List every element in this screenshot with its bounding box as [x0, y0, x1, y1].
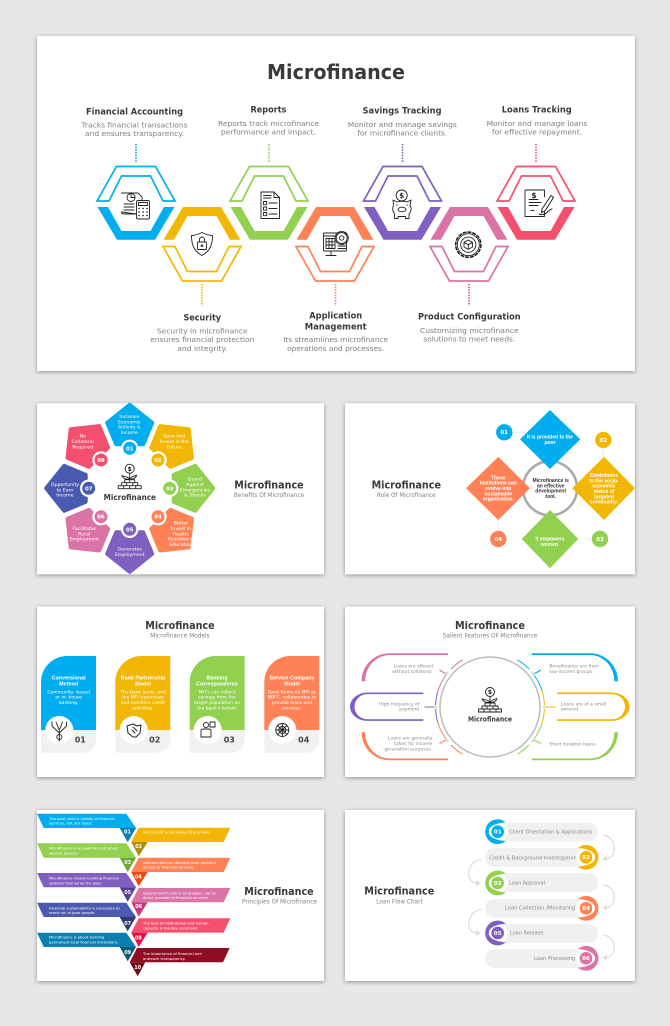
center text	[532, 478, 569, 500]
card 04: Model	[284, 682, 300, 688]
card 01	[41, 656, 96, 753]
card 04: NBFC, collaborates to	[268, 695, 317, 701]
diamond 04: institutions can	[480, 481, 517, 487]
card 04: 04	[298, 736, 310, 745]
principle 09	[37, 933, 136, 961]
principle 01	[37, 814, 136, 842]
step: financial accounting: and ensures transparency.	[85, 130, 184, 138]
principle 08	[131, 918, 230, 947]
panel: role of microfinance	[345, 403, 635, 574]
diamond 04: organization.	[483, 497, 514, 503]
principle 06: Government's role is an enabler, not as	[143, 891, 216, 895]
petal labels: Collateral	[71, 439, 94, 445]
diamond 02: community.	[590, 500, 618, 506]
diamond 02: targeted	[594, 494, 614, 500]
step 02: Credit & Background Investigation	[489, 856, 577, 862]
step: product configuration: Product Configuration	[418, 313, 521, 323]
principle 10: outreach transparency.	[143, 957, 186, 961]
center ring	[523, 461, 577, 515]
petal labels: Increase	[119, 414, 139, 420]
benefits panel background	[37, 403, 324, 574]
principle 08: capacity is the Key constraint.	[143, 926, 199, 930]
card 03	[190, 656, 245, 753]
feature: low income	[532, 653, 618, 681]
petals ring	[46, 405, 213, 572]
diamond 03	[522, 510, 608, 568]
feature: low income: low-income groups.	[549, 669, 593, 675]
card 03: MFI's can collect	[198, 689, 236, 695]
petal labels: Better	[174, 521, 188, 527]
number badges: 05	[126, 527, 134, 533]
number badges: 02	[154, 458, 162, 464]
principle 09: permanent local financial institutions.	[49, 941, 119, 945]
step: security: Security	[184, 313, 221, 323]
diamond 03: women.	[540, 542, 560, 548]
feature: income generation: taken for income	[394, 741, 433, 747]
petal labels: Invest in	[171, 526, 191, 532]
number badges: 06	[97, 515, 105, 521]
principle 06	[131, 888, 230, 917]
step 01: 01	[494, 830, 502, 836]
diamond 04: These	[491, 475, 506, 481]
feature: low income: Beneficiaries are from	[549, 664, 599, 670]
number badges: 07	[85, 486, 93, 492]
heading: Microfinance	[372, 479, 441, 491]
petal labels: Required	[72, 444, 93, 450]
icon: money plant on bricks	[478, 688, 502, 712]
diamond 04: 04	[495, 537, 502, 543]
card 01: Conversional	[52, 676, 86, 682]
step: reports	[218, 106, 319, 240]
icon: money plant on bricks: $	[488, 689, 492, 696]
number badges: 03	[166, 486, 174, 492]
connector lines	[498, 432, 603, 539]
card 02: The bank lends, and	[119, 689, 166, 695]
petal labels: Income	[121, 430, 138, 436]
card 04: services.	[282, 705, 302, 711]
diamond 04	[466, 457, 530, 547]
features panel background	[345, 606, 635, 777]
step 01	[485, 819, 598, 844]
petal labels: Employment	[69, 537, 99, 543]
card 04: provide loans and	[272, 700, 312, 706]
diamond 02: status of	[594, 489, 615, 495]
step 06: 06	[582, 956, 590, 962]
subheading: Role Of Microfinance	[377, 492, 436, 499]
flow arrows	[469, 835, 614, 960]
feature: short duration: Short duration loans.	[549, 742, 597, 748]
principle 09: Microfinance is about building	[49, 936, 104, 940]
petal labels: Guard	[188, 477, 202, 483]
petal labels: Save And	[163, 434, 185, 440]
feature: income generation: generation purposes.	[384, 746, 432, 752]
principle 06: 06	[135, 904, 143, 910]
diamond 03: It empowers	[535, 537, 565, 543]
card 03: Correspondents	[196, 682, 238, 688]
card 02: activities.	[132, 705, 154, 711]
principle 08: 08	[135, 936, 142, 942]
petal labels: Facilitates	[73, 526, 97, 532]
feature: income generation: Loans are generally	[388, 736, 433, 742]
card 03: target population on	[194, 700, 240, 706]
petal labels	[51, 414, 211, 558]
step: savings tracking: for microfinance clients.	[357, 130, 447, 138]
principle 02	[131, 828, 230, 856]
step: financial accounting: Tracks financial transactions	[80, 121, 188, 129]
card 01: 01	[75, 736, 86, 745]
number badges	[80, 440, 178, 538]
flow panel background	[345, 810, 635, 981]
principle 04: access to financial services.	[143, 866, 195, 870]
principle 05: systems that serve the poor.	[49, 881, 102, 885]
step: security: Security in microfinance	[157, 327, 248, 335]
main panel background	[37, 36, 635, 371]
card 04: Bank forms its MFI as	[268, 689, 317, 695]
feature: short duration	[532, 732, 618, 760]
petal labels: Rural	[78, 531, 90, 537]
petal labels: Against	[186, 482, 204, 488]
principle 05: 05	[124, 890, 132, 896]
principle 07	[37, 903, 136, 931]
principle 01: The poor need a variety of financial	[48, 817, 115, 821]
role panel background	[345, 403, 635, 574]
subheading: Principles Of Microfinance	[242, 899, 317, 906]
principle 03	[37, 843, 136, 872]
step 05	[485, 921, 598, 945]
step: application management: Application	[309, 312, 362, 322]
step: loans tracking: Loans Tracking	[502, 106, 572, 116]
heading: Microfinance	[244, 886, 314, 898]
card 02: Model	[135, 682, 151, 688]
number badges: 04	[154, 515, 162, 521]
petal labels: & Shocks	[184, 493, 206, 499]
step: security: and integrity.	[177, 345, 227, 353]
subheading: Microfinance Models	[150, 632, 210, 639]
principle 09: 09	[124, 950, 132, 956]
card 01: Community- based	[47, 689, 90, 695]
petal labels: Future	[167, 444, 182, 450]
outer arc segments	[436, 660, 544, 754]
card 02: and monitors credit	[121, 700, 165, 706]
step 06: Loan Processing	[534, 956, 575, 962]
petal labels: Economic	[118, 419, 141, 425]
diamond 02: Contributes	[590, 473, 618, 479]
principle 10: 10	[134, 965, 142, 971]
principle 02: 02	[135, 844, 143, 850]
step 04: Loan Collection /Monitoring	[505, 906, 575, 912]
card 02: 02	[149, 736, 160, 745]
card 02: Bank Partnership	[121, 676, 166, 682]
step 01: Client Orientation & Applications	[509, 830, 593, 836]
feature: high frequency: High frequency of	[379, 701, 420, 707]
step 03: Loan Approval	[509, 881, 545, 887]
principle 04: 04	[135, 874, 142, 880]
step: loans tracking: for effective repayment.	[492, 129, 582, 137]
card 01: banking.	[59, 700, 78, 706]
step: savings tracking: Savings Tracking	[362, 107, 442, 117]
principle 04	[131, 858, 230, 886]
principle 07: Financial sustainability is necessary to	[49, 906, 120, 910]
icon: money plant on bricks	[118, 464, 141, 489]
subheading: Benefits Of Microfinance	[234, 492, 304, 499]
panel: loan flow chart	[345, 810, 635, 981]
principle 10	[130, 948, 230, 976]
heading: Microfinance	[145, 620, 215, 632]
principle 06: direct provider of financial services.	[143, 896, 209, 900]
card 03: savings from the	[198, 695, 236, 701]
panel: salient features	[345, 606, 635, 777]
principle 07: reach no. of poor people.	[49, 911, 95, 915]
step: savings tracking: Monitor and manage savings	[348, 121, 457, 129]
card 03: Banking	[206, 676, 228, 682]
principle 03: Microfinance is a powerful instrument	[49, 847, 119, 851]
step: application management: Management	[305, 322, 367, 332]
panel: benefits of microfinance	[37, 403, 324, 574]
panel: microfinance models	[37, 606, 324, 777]
card 04: Service Company	[269, 676, 315, 682]
petal labels: Emergencies	[180, 487, 211, 493]
principle 07: 07	[124, 921, 132, 927]
petal labels: No	[80, 434, 86, 440]
step: savings tracking	[348, 107, 457, 240]
petal labels: Invest in the	[160, 439, 189, 445]
principle 10: The importance of financial and	[142, 952, 202, 956]
connector ticks	[424, 670, 556, 744]
feature: income generation	[362, 732, 448, 760]
principle 05: Microfinance means building financial	[49, 876, 119, 880]
center text: Microfinance is	[532, 478, 569, 484]
heading: Microfinance	[234, 479, 304, 491]
central circle	[440, 657, 540, 757]
center text: tool.	[545, 494, 557, 500]
heading: Microfinance	[364, 886, 434, 898]
card 02	[115, 656, 170, 753]
principle 05	[37, 873, 136, 902]
step: application management: Its streamlines microfinance	[283, 336, 388, 344]
petal labels: Income	[56, 493, 74, 499]
principle 01: 01	[124, 830, 131, 836]
models panel background	[37, 606, 324, 777]
card 02: the MFI supervises	[122, 695, 165, 701]
card 01: Method	[59, 682, 78, 688]
petal labels: Activity &	[118, 425, 141, 431]
step 02: 02	[582, 855, 590, 861]
feature: high frequency	[350, 692, 423, 721]
step 04: 04	[582, 906, 590, 912]
step: application management	[283, 207, 388, 353]
diamond 02: 02	[600, 438, 607, 444]
diamond 02: to the socio-	[589, 478, 619, 484]
feature: no collateral: without collateral.	[392, 669, 433, 675]
diamond 02: economic	[592, 484, 616, 490]
diamond 03: 03	[596, 537, 604, 543]
card 01: or in- house	[55, 695, 82, 701]
center text: development	[535, 489, 566, 495]
petal labels: to Earn	[57, 487, 73, 493]
principle 08: The lack of institutional and human	[142, 921, 209, 925]
step: loans tracking	[487, 106, 588, 240]
feature: small amount: Loans are of a small	[561, 701, 606, 707]
step: product configuration	[418, 207, 521, 344]
step: financial accounting: Financial Accounting	[86, 107, 183, 117]
step: application management: operations and processes.	[287, 345, 384, 353]
step: loans tracking: Monitor and manage loans	[487, 120, 588, 128]
step: financial accounting	[80, 107, 188, 240]
step 06	[485, 946, 598, 971]
principle 02: Microcredit is not always the answer	[143, 831, 211, 835]
diamond 02	[572, 432, 635, 520]
step 02	[485, 845, 598, 870]
step: loans tracking: $	[531, 191, 537, 200]
feature: small amount: amount	[561, 707, 579, 713]
card 03: 03	[224, 736, 235, 745]
step: product configuration: Customizing microfinance	[420, 327, 519, 335]
step: reports: Reports track microfinance	[218, 120, 319, 128]
diamond 04: evolve into	[485, 486, 511, 492]
principle 03: against poverty.	[49, 851, 79, 855]
subheading: Loan Flow Chart	[376, 899, 423, 906]
step: reports: Reports	[250, 106, 286, 116]
center text: an effective	[537, 483, 565, 489]
petal labels: Employment	[115, 552, 145, 558]
card 04	[264, 656, 319, 753]
subheading: Salient Features OF Microfinance	[443, 632, 537, 639]
diamond 01: poor	[544, 440, 556, 446]
petal labels: Health,	[173, 531, 190, 537]
principle 03: 03	[124, 860, 132, 866]
step 03	[485, 871, 598, 895]
feature: no collateral	[362, 653, 448, 681]
center label: Microfinance	[104, 493, 156, 502]
diamond 01	[496, 410, 580, 469]
step 05: Loan Release	[510, 931, 543, 937]
petal labels: Nutrition &	[168, 537, 194, 543]
step: product configuration: solutions to meet needs.	[423, 336, 515, 344]
feature: high frequency: payment	[399, 707, 420, 713]
icon: money plant on bricks: $	[128, 466, 132, 473]
panel: main hexagon process	[37, 36, 635, 371]
petal labels: Education	[169, 542, 193, 548]
panel: principles of microfinance	[37, 810, 324, 981]
principles panel background	[37, 810, 324, 981]
feature: small amount	[557, 692, 630, 721]
feature: no collateral: Loans are offered	[394, 664, 433, 670]
step 05: 05	[494, 931, 502, 937]
step: savings tracking: $	[399, 192, 404, 200]
step: security: ensures financial protection	[150, 336, 254, 344]
diamond 01: 01	[501, 430, 508, 436]
center label: Microfinance	[468, 716, 512, 724]
diamond 01: It is provided to the	[527, 435, 573, 441]
principle 01: services, not just loans.	[49, 822, 93, 826]
petal labels: Generates	[118, 547, 142, 553]
step: reports: performance and impact.	[221, 129, 316, 137]
step 04	[485, 896, 598, 921]
title: Microfinance	[267, 60, 405, 84]
card 03: the bank's behalf.	[197, 705, 237, 711]
number badges: 08	[97, 458, 105, 464]
number badges: 01	[126, 446, 134, 452]
heading: Microfinance	[455, 620, 525, 632]
step: security	[150, 207, 254, 353]
step 03: 03	[494, 881, 502, 887]
diamond 04: sustainable	[485, 491, 512, 497]
principle 04: Interest rate can damage poor people's	[143, 861, 216, 865]
petal labels: Opportunity	[51, 482, 79, 488]
